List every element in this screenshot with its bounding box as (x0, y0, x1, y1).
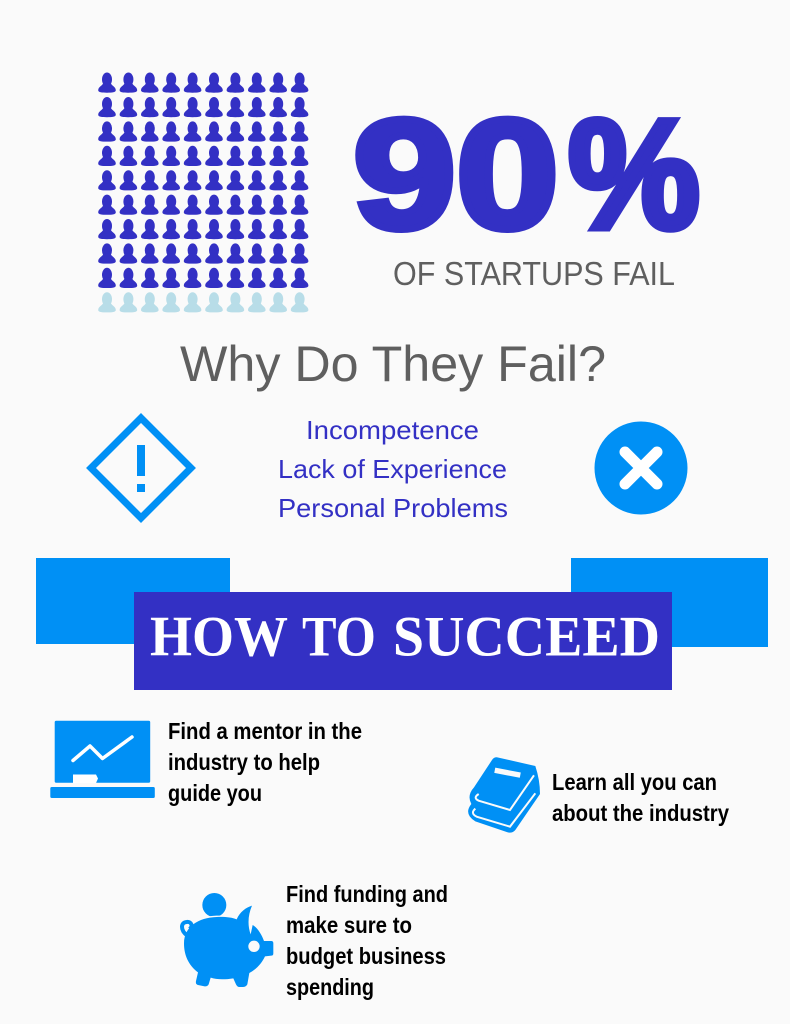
icon: laptop with chart (50, 721, 155, 798)
icon: piggy bank (182, 893, 273, 987)
text: find a mentor: Find a mentor in the (168, 718, 362, 744)
banner: how to succeed: TO (302, 606, 376, 668)
people grid: 90 of 100 (98, 72, 308, 312)
subtitle: of startups fail: OF STARTUPS FAIL (393, 256, 675, 293)
text: learn all you can: about the industry (552, 800, 729, 826)
text: find a mentor (168, 718, 362, 806)
list of failure reasons: Lack of Experience (278, 454, 507, 484)
text: find funding (286, 881, 448, 1000)
text: find funding: make sure to (286, 912, 412, 938)
text: learn all you can (552, 769, 729, 826)
banner: how to succeed: SUCCEED (393, 606, 660, 668)
banner: right blue block (571, 558, 768, 647)
banner: how to succeed: HOW (150, 606, 288, 668)
icon: x in circle (594, 422, 688, 514)
big statistic: 90%: 90 (353, 88, 559, 262)
banner: left blue block (36, 558, 230, 644)
icon: warning diamond (91, 418, 191, 518)
big statistic: 90%: % (568, 88, 700, 262)
list of failure reasons: Personal Problems (278, 493, 508, 523)
text: find funding: budget business (286, 943, 446, 969)
text: find a mentor: guide you (168, 780, 262, 806)
text: learn all you can: Learn all you can (552, 769, 717, 795)
banner: how to succeed (134, 592, 672, 690)
list of failure reasons: Incompetence (306, 415, 479, 445)
text: find funding: spending (286, 974, 374, 1000)
heading: why do they fail: Why Do They Fail? (180, 336, 606, 392)
big statistic: 90% (353, 88, 700, 262)
text: find funding: Find funding and (286, 881, 448, 907)
list of failure reasons (278, 415, 508, 523)
icon: stacked books (468, 757, 540, 833)
text: find a mentor: industry to help (168, 749, 320, 775)
